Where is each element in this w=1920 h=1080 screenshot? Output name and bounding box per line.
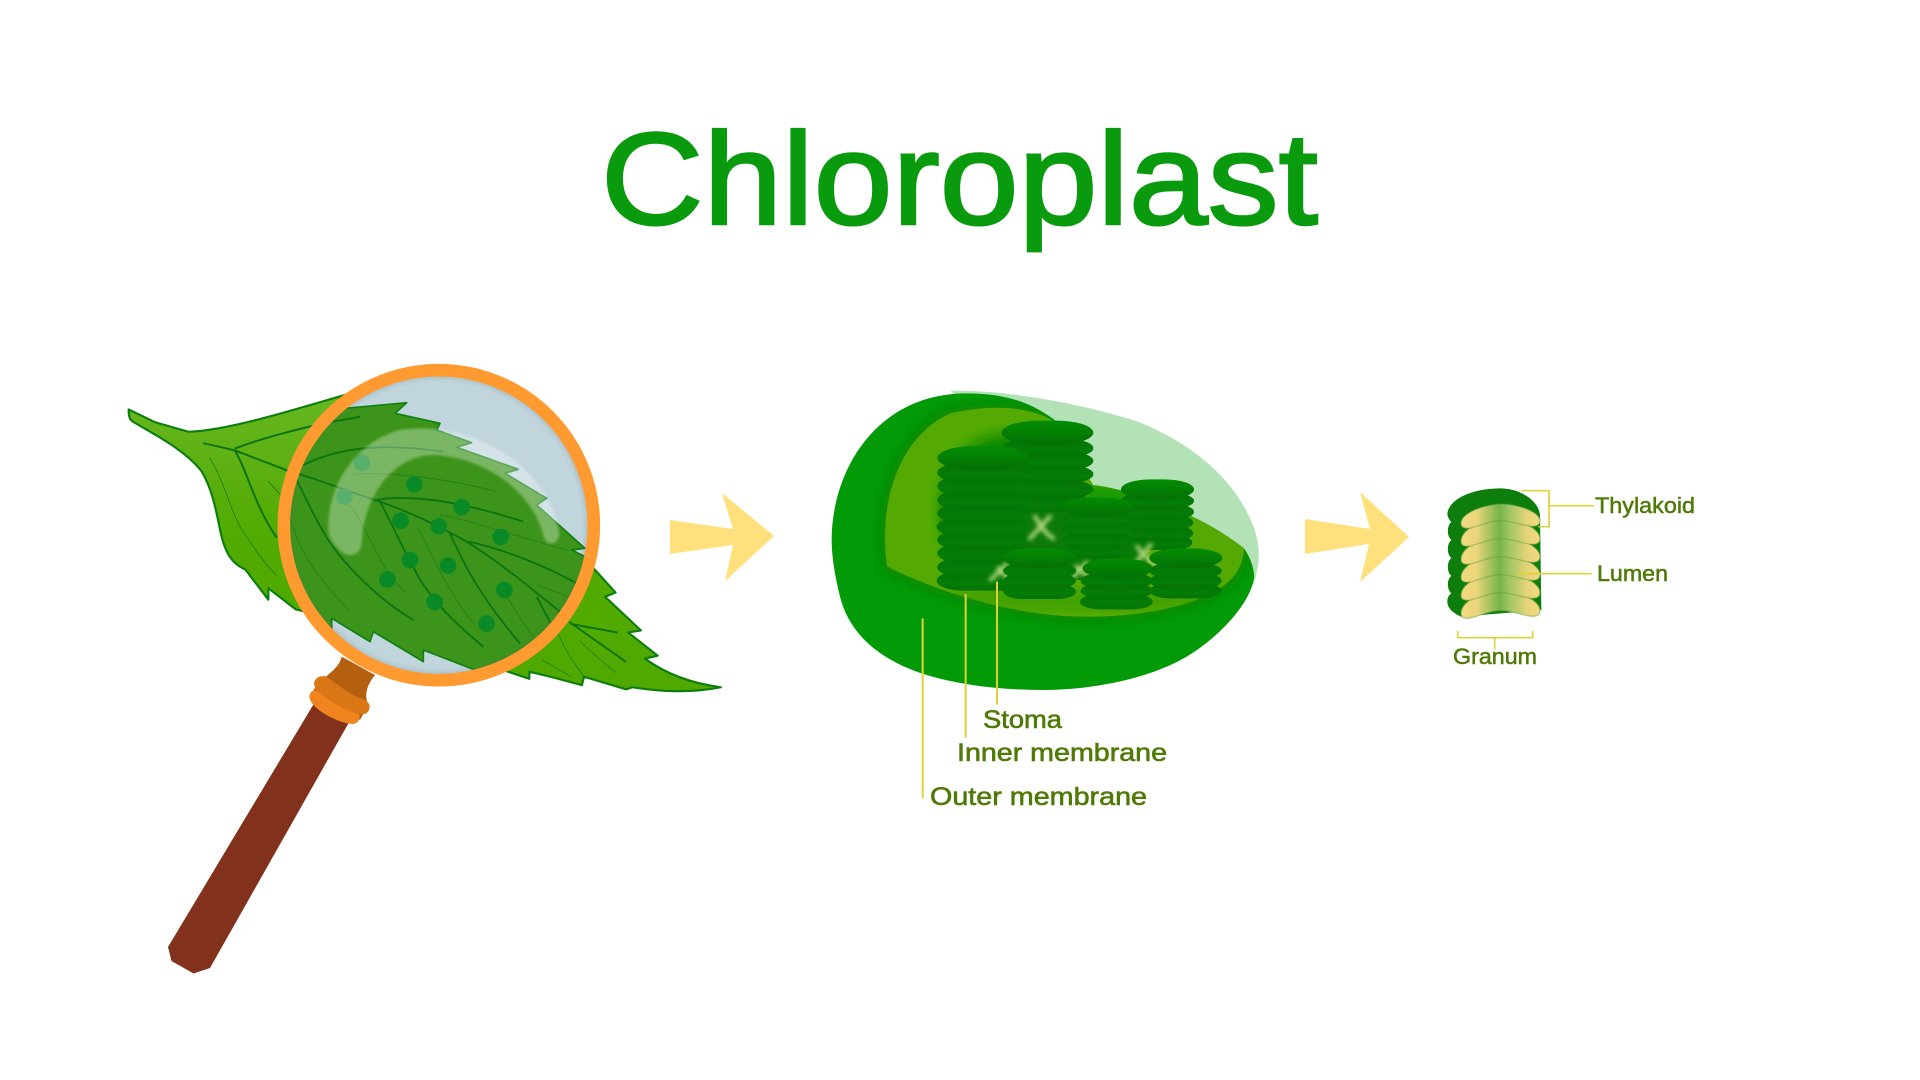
- shaded area behind grana: [1020, 503, 1147, 580]
- chloroplast dots: [336, 454, 513, 632]
- arrow: chloroplast to granum: [1305, 492, 1409, 582]
- stack back centre: [1002, 421, 1093, 512]
- lumen disks: [1461, 504, 1540, 618]
- label: outer membrane: Outer membrane: [930, 783, 1147, 811]
- stack front lower: [1080, 559, 1153, 609]
- leaf under magnifying glass: [129, 393, 721, 691]
- granum leader lines: [1458, 491, 1594, 649]
- thylakoid stack body: [1447, 488, 1541, 617]
- granum: [1447, 488, 1541, 618]
- magnified leaf: [290, 402, 586, 670]
- outer membrane: [832, 393, 1254, 690]
- lens highlight: [328, 428, 559, 555]
- membrane shading: [885, 408, 1244, 617]
- label: thylakoid: Thylakoid: [1595, 493, 1695, 518]
- magnifying lens: [270, 370, 613, 703]
- label: inner membrane: Inner membrane: [957, 739, 1167, 767]
- leader lines: [923, 582, 997, 798]
- chloroplast: [832, 391, 1259, 798]
- outer envelope back: [950, 391, 1259, 585]
- leaf veins: [297, 417, 577, 647]
- title: Chloroplast: [601, 105, 1318, 252]
- inner membrane cavity: [885, 408, 1244, 617]
- label: stoma: Stoma: [983, 706, 1062, 734]
- stack front right: [1149, 548, 1222, 598]
- label: granum: Granum: [1453, 644, 1537, 669]
- stack front centre: [1003, 548, 1076, 599]
- lens ring: [284, 370, 594, 680]
- label: lumen: Lumen: [1597, 561, 1668, 586]
- arrow: leaf to chloroplast: [670, 493, 774, 581]
- magnifier handle: [168, 657, 375, 974]
- stack front left: [937, 446, 1028, 591]
- stack right back: [1121, 479, 1194, 550]
- stroma lamellae: [991, 517, 1156, 579]
- grana stacks: [937, 421, 1222, 609]
- stack middle: [1062, 497, 1133, 558]
